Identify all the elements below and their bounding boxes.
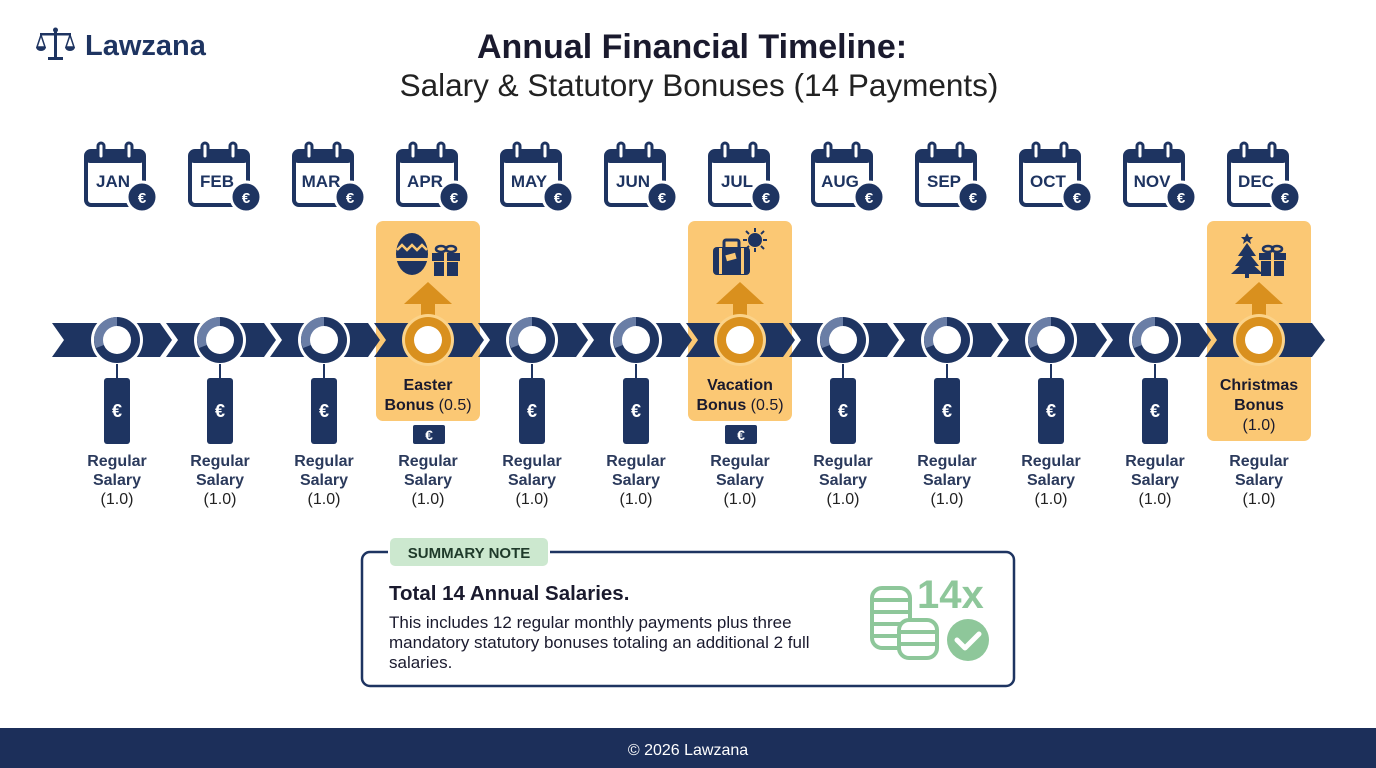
salary labels: Salary — [93, 472, 141, 489]
summary tag — [389, 537, 549, 567]
salary labels: (1.0) — [412, 491, 444, 508]
calendars row: MAY — [511, 172, 548, 191]
icon: coins 14x: 14x — [917, 573, 984, 617]
salary pins: € — [838, 401, 848, 421]
salary pins: € — [112, 401, 122, 421]
timeline band — [52, 323, 1325, 357]
highlight: easter bonus — [376, 221, 480, 421]
salary labels: Regular — [917, 453, 977, 470]
salary labels: (1.0) — [516, 491, 548, 508]
salary labels: Salary — [819, 472, 867, 489]
calendars row: € — [658, 190, 667, 207]
salary labels: (1.0) — [931, 491, 963, 508]
title — [400, 28, 998, 103]
calendars row: € — [554, 190, 563, 207]
bonus labels — [384, 377, 1298, 434]
salary pins: € — [215, 401, 225, 421]
title: Annual Financial Timeline: — [477, 28, 907, 66]
salary labels: Regular — [1229, 453, 1289, 470]
salary labels: (1.0) — [101, 491, 133, 508]
calendars row: € — [762, 190, 771, 207]
salary pins: € — [319, 401, 329, 421]
bonus labels: Christmas — [1220, 377, 1298, 394]
bonus labels: Bonus — [1234, 397, 1284, 414]
calendars row: € — [865, 190, 874, 207]
salary labels: Regular — [87, 453, 147, 470]
salary labels: Regular — [294, 453, 354, 470]
salary pins: € — [425, 427, 433, 443]
salary labels: Salary — [923, 472, 971, 489]
salary labels: (1.0) — [1243, 491, 1275, 508]
calendars row: JUL — [721, 172, 753, 191]
salary labels: Salary — [1027, 472, 1075, 489]
summary text: This includes 12 regular monthly payments plus three — [389, 613, 792, 632]
highlight: christmas bonus — [1207, 221, 1311, 441]
calendars row: FEB — [200, 172, 234, 191]
salary labels: Salary — [1235, 472, 1283, 489]
summary text: mandatory statutory bonuses totaling an additional 2 full — [389, 633, 810, 652]
logo — [36, 28, 207, 62]
icon: sun — [743, 228, 767, 252]
icon: suitcase — [713, 240, 750, 275]
icon: gift — [1259, 246, 1286, 276]
calendars row: € — [242, 190, 251, 207]
highlight: vacation bonus — [688, 221, 792, 421]
summary text: Total 14 Annual Salaries. — [389, 582, 629, 605]
salary pins: € — [942, 401, 952, 421]
salary labels: Salary — [1131, 472, 1179, 489]
salary labels: Regular — [398, 453, 458, 470]
calendars row: JAN — [96, 172, 130, 191]
salary labels: (1.0) — [308, 491, 340, 508]
salary labels: Regular — [606, 453, 666, 470]
arrow up — [716, 282, 764, 321]
calendars row: AUG — [821, 172, 859, 191]
calendars row: € — [969, 190, 978, 207]
summary text — [389, 582, 810, 672]
calendars row: APR — [407, 172, 443, 191]
salary pins: € — [527, 401, 537, 421]
calendars row: MAR — [302, 172, 340, 191]
salary labels: (1.0) — [1139, 491, 1171, 508]
footer — [0, 728, 1376, 768]
salary labels: Salary — [300, 472, 348, 489]
bonus labels: (1.0) — [1243, 417, 1275, 434]
calendars row: € — [1281, 190, 1290, 207]
salary labels: Salary — [508, 472, 556, 489]
salary pins: € — [631, 401, 641, 421]
salary labels: Regular — [813, 453, 873, 470]
summary tag: SUMMARY NOTE — [408, 545, 530, 562]
footer: © 2026 Lawzana — [628, 742, 748, 759]
summary box — [362, 537, 1014, 686]
calendars row: DEC — [1238, 172, 1274, 191]
salary pins: € — [1046, 401, 1056, 421]
icon: tree — [1231, 233, 1263, 278]
calendars row: NOV — [1134, 172, 1171, 191]
salary labels: (1.0) — [827, 491, 859, 508]
calendars row: € — [138, 190, 147, 207]
salary labels: (1.0) — [724, 491, 756, 508]
salary labels: (1.0) — [204, 491, 236, 508]
calendars row — [86, 143, 1300, 212]
salary labels: Regular — [1125, 453, 1185, 470]
arrow up — [404, 282, 452, 321]
logo: Lawzana — [85, 30, 207, 62]
salary labels: Salary — [716, 472, 764, 489]
arrow up — [1235, 282, 1283, 321]
salary labels: Regular — [710, 453, 770, 470]
calendars row: SEP — [927, 172, 961, 191]
salary pins: € — [1150, 401, 1160, 421]
bonus labels: Bonus (0.5) — [384, 397, 472, 414]
salary labels: Regular — [1021, 453, 1081, 470]
salary labels: Salary — [196, 472, 244, 489]
salary pins — [104, 364, 1168, 444]
title: Salary & Statutory Bonuses (14 Payments) — [400, 67, 998, 103]
bonus labels: Easter — [404, 377, 452, 394]
timeline nodes — [91, 314, 1285, 366]
icon: egg — [396, 233, 428, 275]
salary labels: Regular — [190, 453, 250, 470]
salary labels: Salary — [612, 472, 660, 489]
calendars row: JUN — [616, 172, 650, 191]
calendars row: OCT — [1030, 172, 1067, 191]
salary pins: € — [737, 427, 745, 443]
calendars row: € — [346, 190, 355, 207]
salary labels: Salary — [404, 472, 452, 489]
salary labels — [87, 453, 1289, 508]
calendars row: € — [450, 190, 459, 207]
salary labels: (1.0) — [620, 491, 652, 508]
summary text: salaries. — [389, 653, 452, 672]
bonus labels: Bonus (0.5) — [696, 397, 784, 414]
icon: gift — [432, 246, 460, 276]
salary labels: Regular — [502, 453, 562, 470]
calendars row: € — [1177, 190, 1186, 207]
salary labels: (1.0) — [1035, 491, 1067, 508]
bonus labels: Vacation — [707, 377, 773, 394]
icon: coins 14x — [872, 573, 989, 661]
calendars row: € — [1073, 190, 1082, 207]
